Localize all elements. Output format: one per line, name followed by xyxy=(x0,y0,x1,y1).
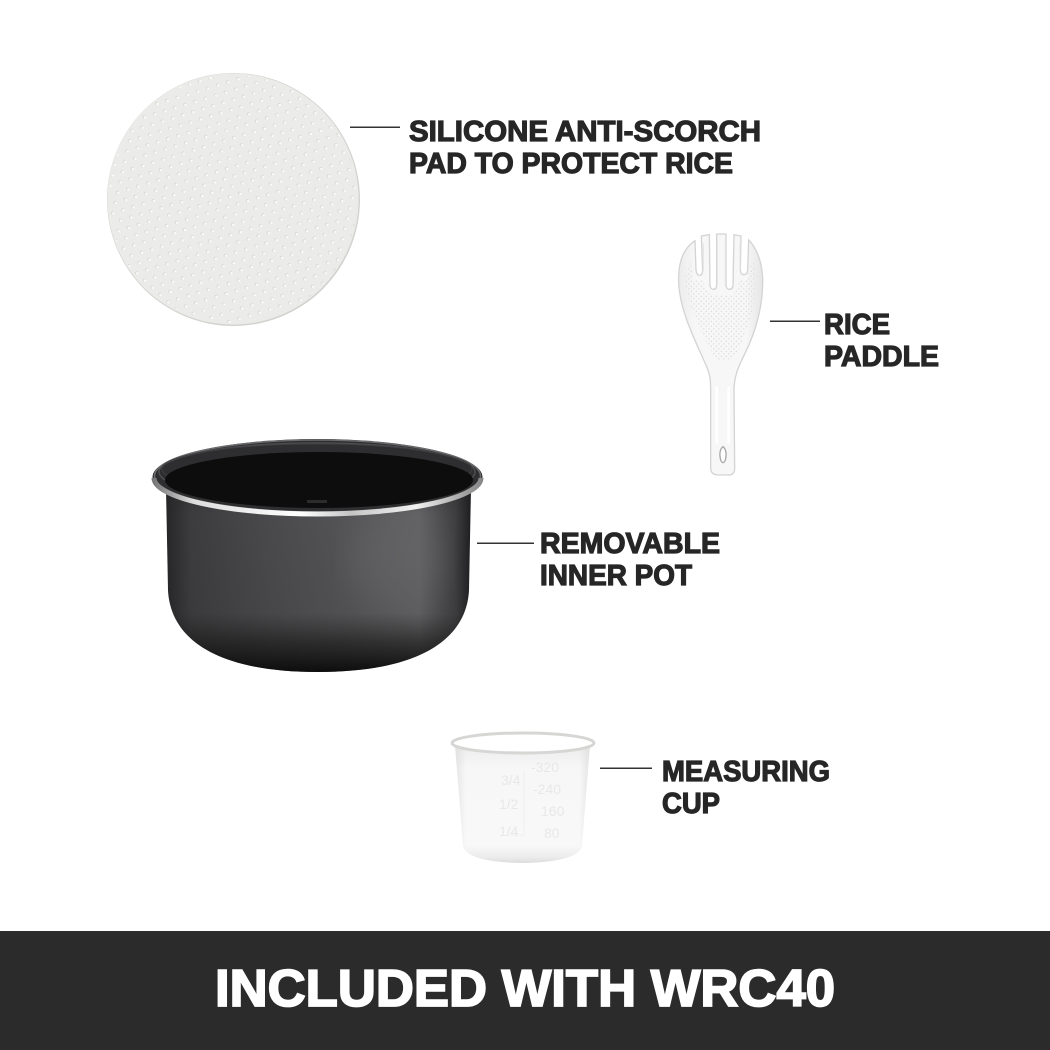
callout: silicone pad: PAD TO PROTECT RICE xyxy=(409,148,733,180)
callout: inner pot: REMOVABLE xyxy=(540,528,720,560)
footer banner: INCLUDED WITH WRC40 xyxy=(215,960,835,1018)
measuring cup markings: 160 xyxy=(541,803,565,819)
icon: measuring cup xyxy=(452,733,594,863)
callout: measuring cup: CUP xyxy=(662,788,720,820)
icon: silicone anti-scorch pad xyxy=(107,73,360,326)
callout: rice paddle: PADDLE xyxy=(824,341,939,373)
measuring cup markings: -240 xyxy=(533,781,561,797)
callout: measuring cup xyxy=(600,756,830,820)
measuring cup markings: 1/4 xyxy=(499,823,519,839)
measuring cup markings: 1/2 xyxy=(499,796,519,812)
footer banner xyxy=(0,931,1050,1050)
callout: silicone pad xyxy=(350,116,761,180)
callout: measuring cup: MEASURING xyxy=(662,756,830,788)
icon: removable inner pot xyxy=(152,439,482,672)
measuring cup markings: 3/4 xyxy=(501,772,521,788)
measuring cup markings: 80 xyxy=(544,825,560,841)
icon: rice paddle xyxy=(679,234,763,475)
measuring cup markings xyxy=(499,759,565,841)
callout: silicone pad: SILICONE ANTI-SCORCH xyxy=(409,116,761,148)
callout: rice paddle xyxy=(770,309,939,373)
callout: inner pot: INNER POT xyxy=(540,560,692,592)
measuring cup markings: -320 xyxy=(531,759,559,775)
callout: inner pot xyxy=(477,528,720,592)
callout: rice paddle: RICE xyxy=(824,309,890,341)
